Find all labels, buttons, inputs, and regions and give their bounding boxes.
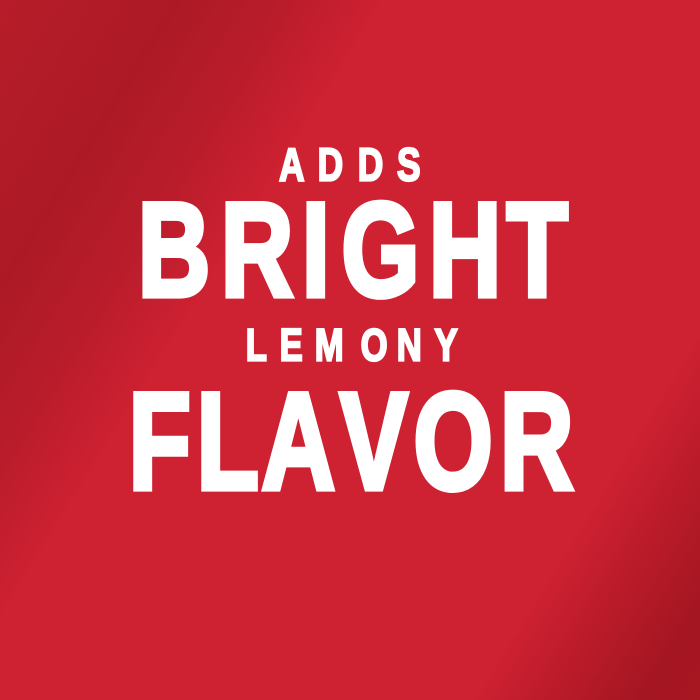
word: ADDS: ADDS <box>279 139 421 191</box>
word: FLAVOR: FLAVOR <box>129 364 574 518</box>
word: LEMONY: LEMONY <box>246 319 458 371</box>
word: BRIGHT: BRIGHT <box>138 176 568 325</box>
